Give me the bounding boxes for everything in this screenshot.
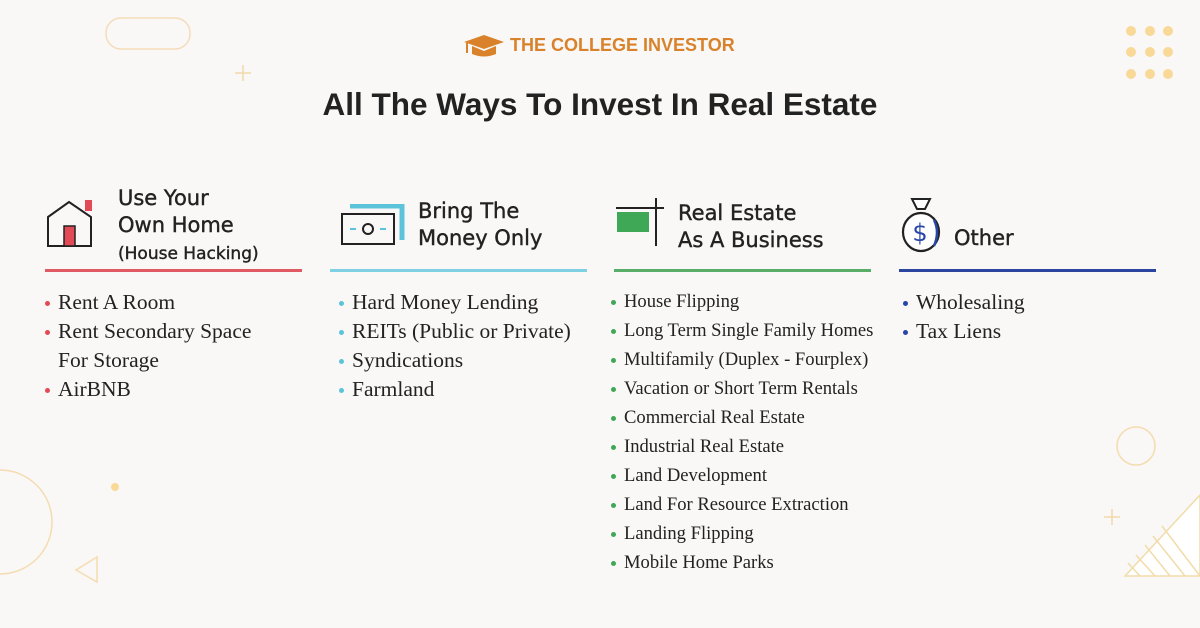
list: business: Land For Resource Extraction: [624, 494, 849, 515]
list: business: Commercial Real Estate: [624, 407, 805, 428]
list: business: Land Development: [624, 465, 767, 486]
list: own home: [45, 290, 251, 401]
icon: house: [47, 200, 92, 247]
list: money: Syndications: [352, 348, 463, 372]
heading: Own Home: [118, 213, 234, 237]
icon: money bag: [902, 198, 940, 252]
heading: [118, 186, 259, 264]
heading: Bring The: [418, 199, 519, 223]
panel: own home: [47, 186, 259, 264]
list: own home: AirBNB: [58, 377, 131, 401]
list: own home: Rent A Room: [58, 290, 175, 314]
icon: sign: [616, 198, 664, 246]
list: business: Industrial Real Estate: [624, 436, 784, 457]
list: own home: For Storage: [58, 348, 159, 372]
heading: Other: [954, 226, 1014, 250]
list: business: Multifamily (Duplex - Fourplex): [624, 349, 868, 370]
logo: THE COLLEGE INVESTOR: [510, 35, 735, 55]
list: other: Wholesaling: [916, 290, 1025, 314]
list: money: Farmland: [352, 377, 434, 401]
heading: Real Estate: [678, 201, 796, 225]
list: other: [903, 290, 1025, 343]
list: business: Landing Flipping: [624, 523, 754, 544]
heading: (House Hacking): [118, 244, 259, 264]
heading: [418, 199, 542, 250]
list: money: [339, 290, 571, 401]
heading: Money Only: [418, 226, 542, 250]
panel: business: [616, 198, 824, 252]
list: business: Long Term Single Family Homes: [624, 320, 873, 341]
list: business: House Flipping: [624, 291, 739, 312]
heading: As A Business: [678, 228, 824, 252]
list: other: Tax Liens: [916, 319, 1001, 343]
heading: Use Your: [118, 186, 209, 210]
heading: [678, 201, 824, 252]
list: business: Mobile Home Parks: [624, 552, 774, 573]
list: money: REITs (Public or Private): [352, 319, 571, 343]
list: money: Hard Money Lending: [352, 290, 538, 314]
list: own home: Rent Secondary Space: [58, 319, 251, 343]
title: All The Ways To Invest In Real Estate: [323, 86, 877, 122]
panel: other: [902, 198, 1014, 252]
list: business: Vacation or Short Term Rentals: [624, 378, 858, 399]
list: business: [611, 291, 873, 573]
icon: cash: [341, 204, 404, 245]
icon: money bag: $: [912, 219, 928, 247]
panel: money: [341, 199, 542, 250]
